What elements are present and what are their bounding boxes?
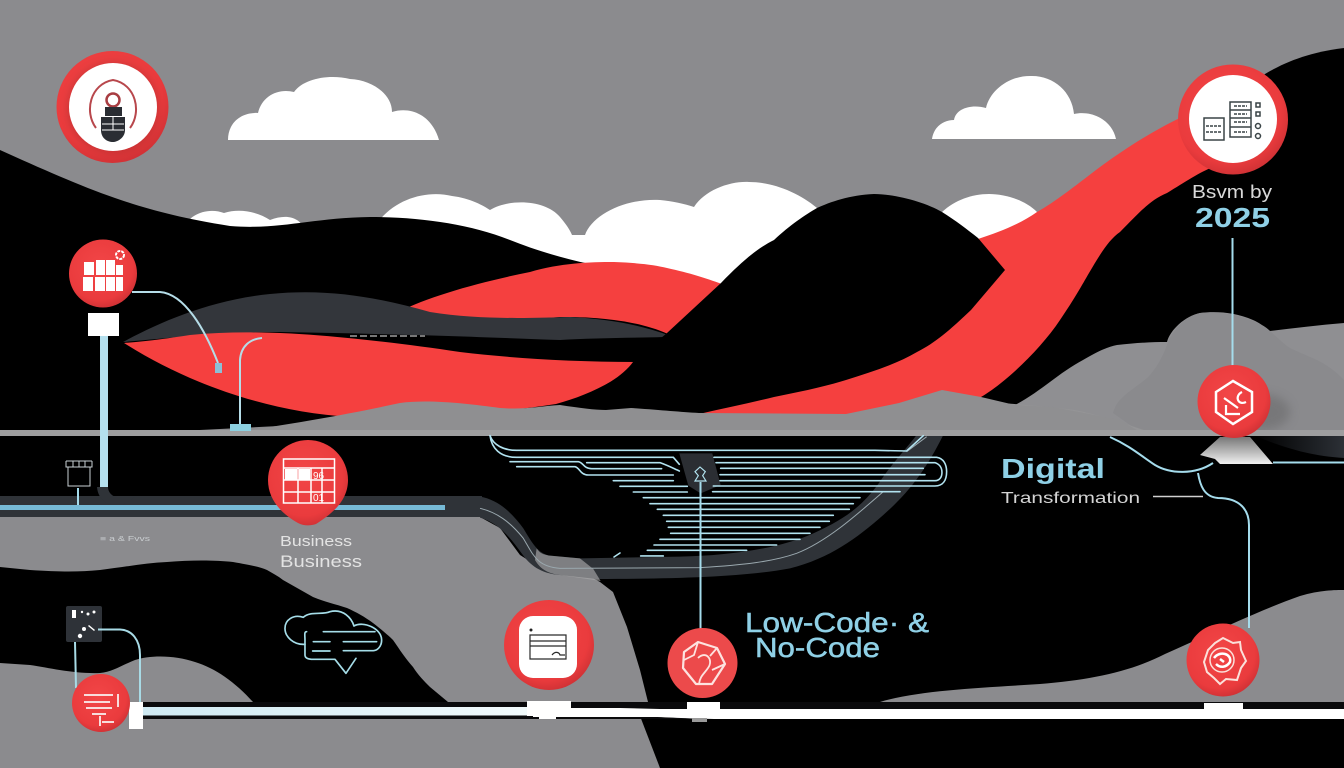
vertical post: [100, 336, 108, 487]
dark grey lens: [123, 292, 668, 342]
upper red hill: [398, 262, 722, 334]
label: Transformation: Transformation: [1001, 490, 1140, 507]
line grid diagram: [490, 436, 947, 557]
connector base: [230, 424, 251, 431]
dark shading right of trapezoid: [1255, 436, 1344, 458]
pipeline tube sweep: [480, 435, 943, 581]
left device icon: [66, 461, 92, 505]
connector end cap: [215, 363, 222, 373]
clouds behind mountains: [183, 182, 1037, 300]
small caption in grey: ≡ a & Fvvs: [100, 534, 150, 543]
circle: polygon emblem: [668, 628, 738, 698]
central black peak: [540, 194, 1005, 416]
label: Digital: Digital: [1001, 453, 1105, 484]
icon box lower left: [66, 606, 102, 642]
label: Business: Business: [280, 533, 352, 550]
blue pipeline line: [0, 505, 445, 510]
mountain: left black mass: [0, 150, 700, 440]
rail connector tabs: [129, 701, 1243, 729]
pipeline tube elbow: [97, 487, 135, 508]
horizon band: [0, 430, 1344, 436]
connector lines top-left: [132, 292, 262, 424]
circle: grid blocks: [69, 240, 137, 308]
cloud: top right: [932, 76, 1116, 139]
transformation leader line: [1153, 496, 1203, 498]
vertical connector from grid to circle: [700, 482, 702, 630]
small node icon: [695, 467, 706, 481]
right grey hills: [1000, 312, 1344, 432]
lower-left grey ground: [0, 517, 660, 768]
circle: calendar: 96: [313, 471, 325, 482]
white post head: [88, 313, 119, 336]
label: Low-Code: Low-Code· &: [745, 607, 929, 638]
mountain: right black mass: [960, 48, 1344, 440]
lower red lens: [124, 332, 640, 418]
lower-right grey hill: [880, 590, 1344, 704]
circle: calendar: [268, 440, 348, 525]
cloud: top left: [228, 77, 439, 140]
red ribbon sweeping to top right: [690, 116, 1233, 414]
circle: gear emblem: [1186, 624, 1260, 696]
label: built by: Bsvm by: [1192, 182, 1272, 202]
circle: lower-left document: [72, 674, 130, 732]
bottom-right black floor: [640, 716, 1344, 768]
bottom timeline rail: [143, 702, 1344, 719]
connectors from icon box: [75, 630, 140, 702]
circle shadow on hill: [1234, 394, 1290, 430]
pipeline tube left: [0, 496, 482, 517]
lower section black: [0, 434, 1344, 768]
circle: calendar: 01: [313, 493, 325, 504]
connector lines right: [1110, 238, 1344, 628]
circle: top left lightbulb: [56, 51, 168, 163]
centre dark block: [679, 453, 721, 493]
speech cloud icon: [285, 611, 382, 673]
circle: hexagon tool: [1198, 365, 1270, 438]
circle: top right data tables: [1178, 64, 1288, 174]
circle: document panel: [504, 600, 594, 690]
low grey ridge: [238, 390, 1140, 432]
label: No-Code: No-Code: [755, 632, 880, 663]
trapezoid pedestal: [1200, 437, 1273, 464]
lower-left black wave: [0, 560, 448, 702]
dashed tick on lens: [350, 335, 425, 337]
label: Business second line: Business: [280, 552, 362, 571]
label: 2025: 2025: [1195, 202, 1270, 233]
